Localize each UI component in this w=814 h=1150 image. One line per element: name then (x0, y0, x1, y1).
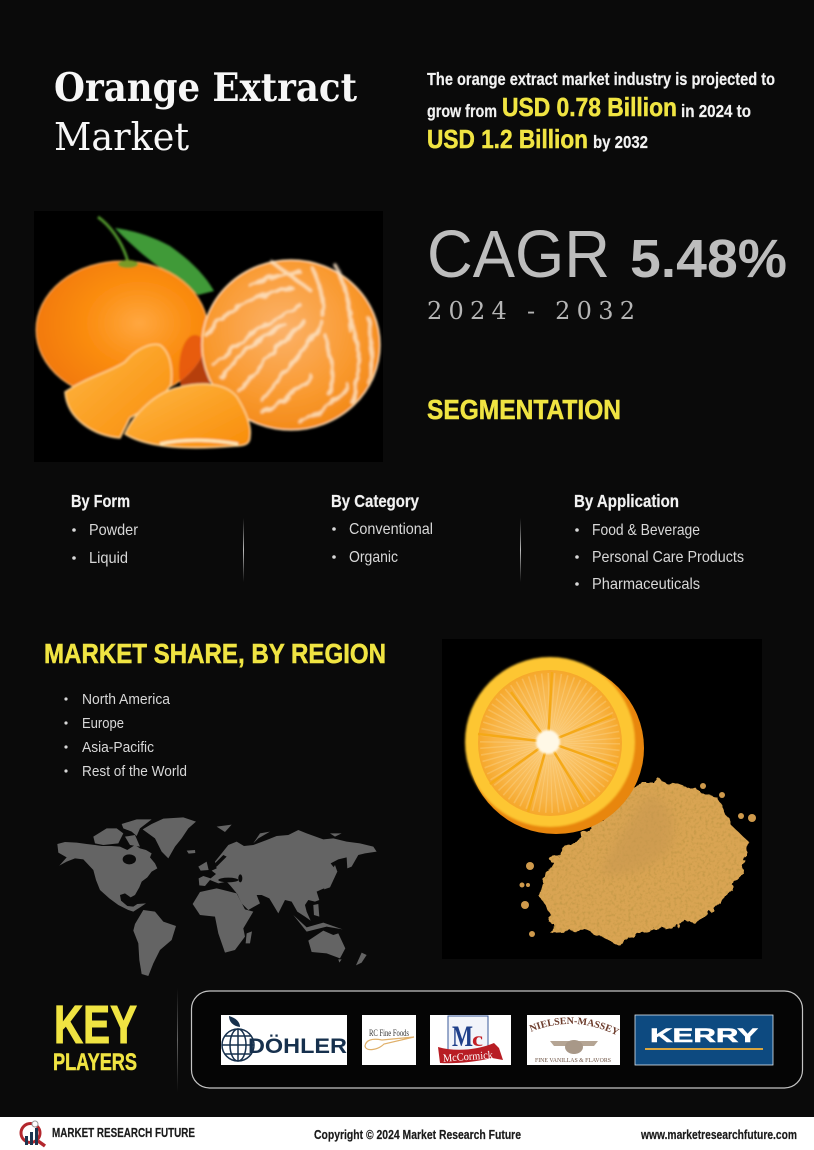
footer bar (0, 1117, 814, 1150)
world map (57, 817, 377, 976)
CAGR: CAGR (427, 217, 610, 292)
region list: Rest of the World (82, 763, 187, 780)
region list: North America (82, 691, 171, 708)
key players label: KEY (54, 995, 137, 1055)
leaf (115, 228, 214, 295)
logo: McCormick (430, 1015, 511, 1065)
segment: by application: Pharmaceuticals (592, 576, 700, 593)
whole orange (36, 261, 208, 399)
segment: by category: Organic (349, 549, 398, 566)
title: Market (54, 115, 189, 159)
orange segment right (125, 384, 250, 448)
title: Orange Extract (54, 65, 357, 111)
logo: Kerry (635, 1015, 773, 1065)
market forecast text: USD 1.2 Billion (427, 124, 588, 154)
logo: RC Fine Foods: RC Fine Foods (369, 1028, 409, 1038)
market forecast text: by 2032 (593, 132, 648, 152)
footer logo icon (21, 1121, 45, 1146)
region list: Europe (82, 715, 124, 732)
segment: by form: By Form (71, 491, 130, 511)
market forecast text: grow from (427, 101, 497, 121)
stem (98, 217, 128, 262)
CAGR (427, 217, 787, 292)
market forecast text: in 2024 to (681, 101, 751, 121)
orange segment left (65, 344, 172, 438)
segment: by application: Food & Beverage (592, 522, 700, 539)
key players label: PLAYERS (53, 1049, 137, 1076)
logo: McCormick: M (452, 1020, 473, 1053)
footer bar: MARKET RESEARCH FUTURE (52, 1126, 195, 1140)
segment: by application: Personal Care Products (592, 549, 744, 566)
segment: by form: Powder (89, 522, 139, 539)
heading: segmentation: SEGMENTATION (427, 394, 621, 425)
segment: by category: Conventional (349, 521, 433, 538)
footer bar: Copyright © 2024 Market Research Future (314, 1128, 521, 1142)
key players panel (190, 990, 804, 1089)
segment: by application: By Application (574, 491, 679, 511)
image: mandarin oranges (34, 211, 383, 462)
logo: Nielsen-Massey (527, 1015, 620, 1065)
logo: RC Fine Foods (362, 1015, 416, 1065)
orange shadow between fruit (179, 335, 211, 405)
segment: by category (331, 491, 433, 566)
logo: Dohler: DÖHLER (248, 1035, 347, 1058)
segment: by category: By Category (331, 491, 419, 511)
peeled orange (202, 260, 380, 430)
powder pile (540, 780, 750, 945)
segment: by form (71, 491, 139, 567)
region list (64, 691, 187, 780)
orange half side (468, 662, 644, 834)
market forecast text: USD 0.78 Billion (502, 92, 677, 122)
CAGR: 5.48% (630, 229, 787, 289)
logo: McCormick: c (472, 1029, 483, 1051)
orange half rim (465, 657, 635, 827)
title (54, 65, 357, 159)
logo: Nielsen-Massey: FINE VANILLAS & FLAVORS (535, 1057, 611, 1064)
logo: Dohler (221, 1015, 347, 1065)
logo: McCormick: McCormick (443, 1049, 494, 1065)
logo: Kerry: KERRY (650, 1026, 759, 1047)
orange half face (478, 670, 622, 816)
key players label (53, 995, 137, 1076)
forecast period: 2024 - 2032 (427, 297, 635, 325)
image: orange half and powder (442, 639, 762, 959)
orange core (536, 730, 560, 754)
logo: Nielsen-Massey: NIELSEN-MASSEY (528, 1017, 620, 1035)
heading: market share by region: MARKET SHARE, BY REGION (44, 638, 386, 669)
market forecast text (427, 69, 775, 154)
region list: Asia-Pacific (82, 739, 154, 756)
segment: by form: Liquid (89, 550, 128, 567)
segment: by application (574, 491, 744, 593)
orange pulp streaks (508, 701, 592, 785)
